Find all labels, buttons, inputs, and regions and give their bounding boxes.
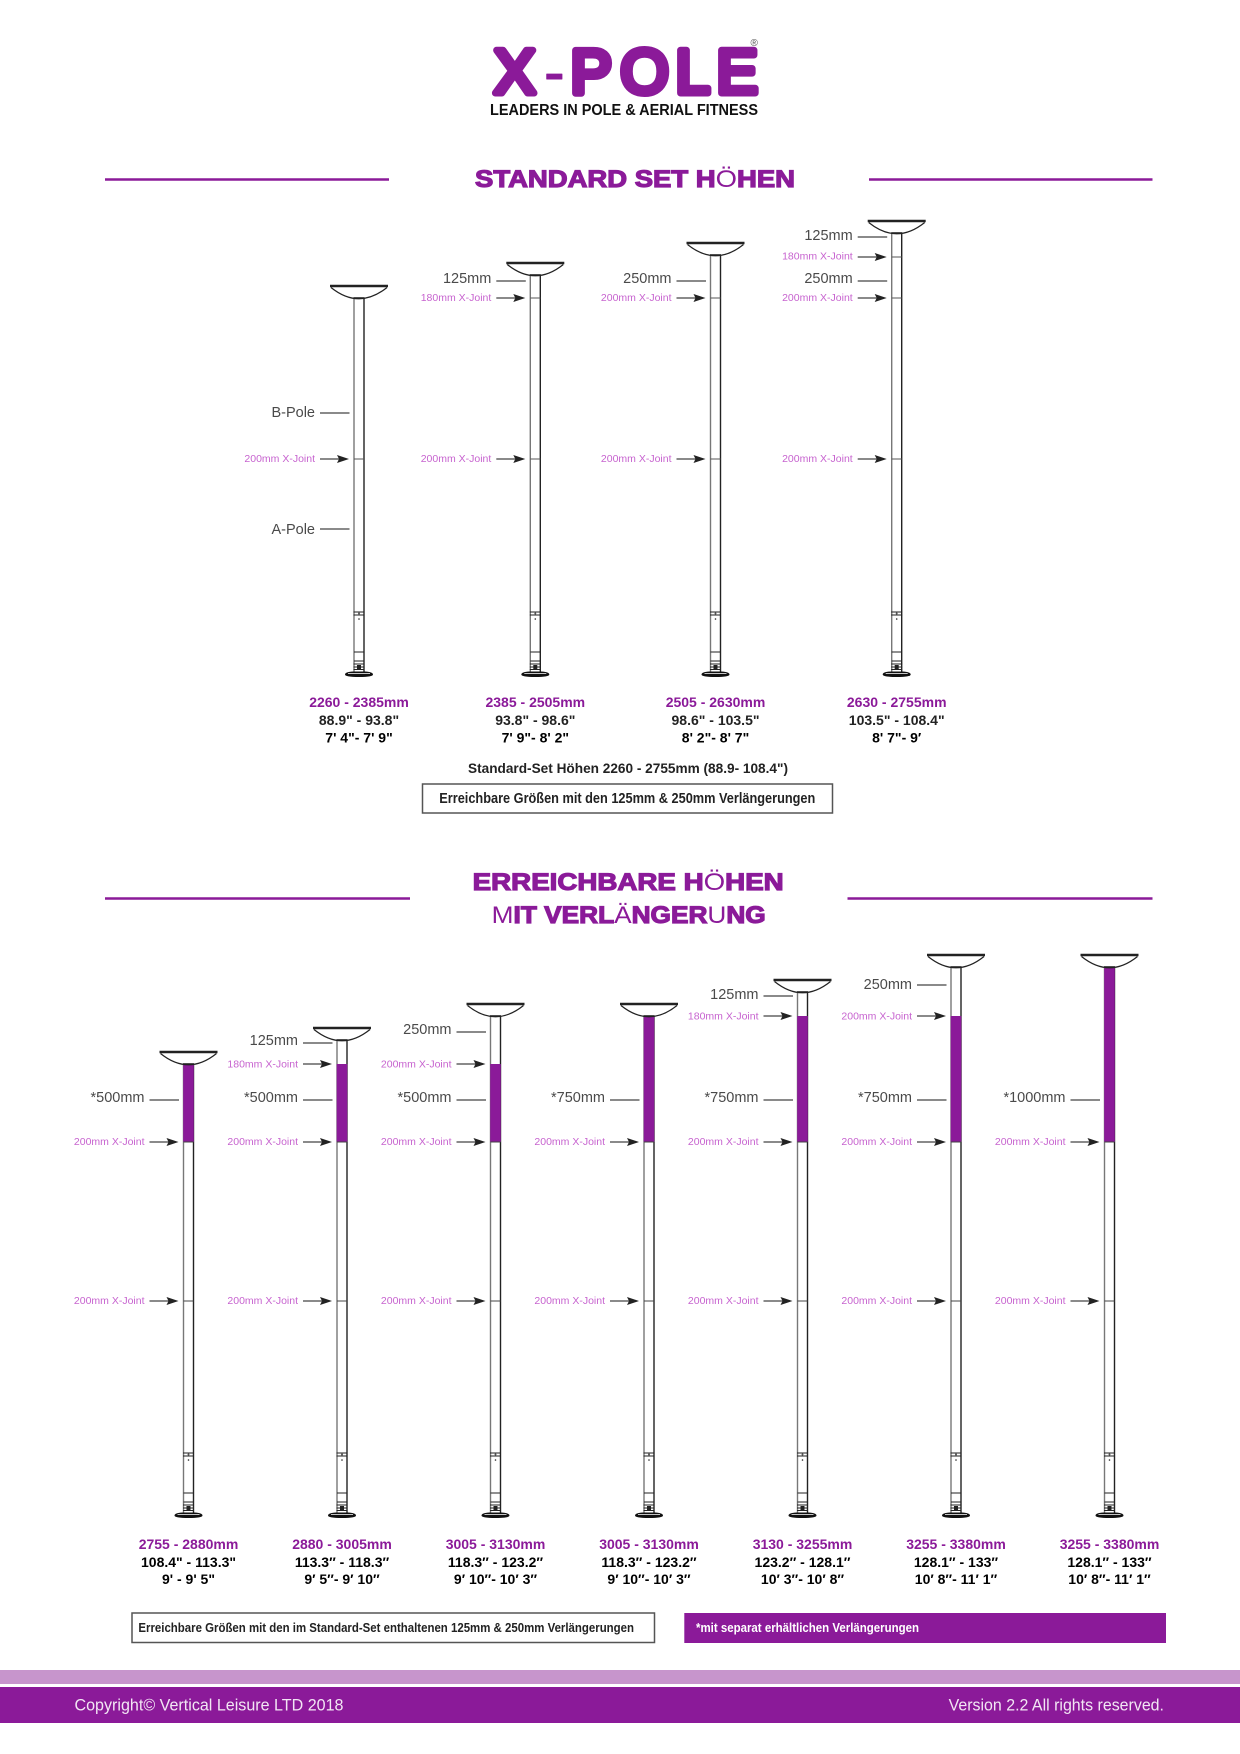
logo wordmark: L [676, 38, 710, 107]
callout: 200mm joint lower: 200mm X-Joint [782, 453, 853, 465]
callout: 200mm joint upper: 200mm X-Joint [782, 292, 853, 304]
note box: reachable sizes: Erreichbare Größen mit den 125mm & 250mm Verlängerungen [439, 791, 815, 807]
callout: 200mm joint lower: 200mm X-Joint [601, 453, 672, 465]
height values: 123.2″ - 128.1″ [755, 1554, 851, 1570]
callout: B-Pole [271, 405, 350, 421]
height values [309, 694, 409, 746]
callout: 200mm joint upper [995, 1136, 1100, 1148]
callout: 200mm joint lower [534, 1295, 639, 1307]
extended pole 7: 3255-3380mm [995, 955, 1159, 1587]
callout: 750mm extension [704, 1090, 793, 1106]
callout: 200mm joint: 200mm X-Joint [421, 453, 491, 465]
logo wordmark: X [494, 38, 535, 107]
callout: 200mm joint lower [995, 1295, 1100, 1307]
callout: 200mm joint upper [688, 1136, 792, 1148]
callout: 250mm: 250mm [804, 271, 853, 287]
heading: reachable heights with extension [105, 869, 1152, 929]
callout: 750mm extension: *750mm [858, 1090, 912, 1106]
extended pole 3: 3005-3130mm [381, 1004, 545, 1587]
height values: 3255 - 3380mm [906, 1536, 1006, 1552]
height values: 2260 - 2385mm [309, 694, 409, 710]
callout: 200mm joint lower: 200mm X-Joint [227, 1295, 298, 1307]
callout: 500mm extension [244, 1090, 332, 1106]
height values [599, 1536, 699, 1587]
height values [906, 1536, 1006, 1587]
callout: 200mm joint [421, 453, 525, 465]
heading: reachable heights with extension: ERREICHBARE H ÖHEN [473, 869, 784, 896]
callout: 200mm joint upper [534, 1136, 639, 1148]
callout: 500mm extension [90, 1090, 179, 1106]
height values: 8' 2"- 8' 7" [682, 730, 749, 746]
height values [847, 694, 947, 746]
callout: 200mm joint upper [601, 292, 706, 304]
callout: 1000mm extension: *1000mm [1003, 1090, 1066, 1106]
extended pole 6: 3255-3380mm [841, 955, 1006, 1587]
callout: 750mm extension: *750mm [551, 1090, 605, 1106]
height values: 2755 - 2880mm [139, 1536, 238, 1552]
callout: 200mm joint top: 200mm X-Joint [381, 1058, 452, 1070]
pole body [1080, 955, 1138, 1518]
callout: 200mm joint lower: 200mm X-Joint [381, 1295, 452, 1307]
copyright: Copyright© Vertical Leisure LTD 2018 [74, 1696, 344, 1714]
callout: 200mm joint lower [782, 453, 887, 465]
pole 1: 2260-2385mm [244, 286, 409, 746]
pole body [330, 286, 388, 677]
note box: included extensions: Erreichbare Größen mit den im Standard-Set enthaltenen 125mm & 250mm Verlängerungen [138, 1621, 634, 1635]
standard set range text: Standard-Set Höhen 2260 - 2755mm (88.9- 108.4") [468, 760, 788, 776]
footer [0, 1687, 1240, 1723]
callout: 125mm [710, 987, 793, 1003]
height values: 88.9" - 93.8" [319, 712, 399, 728]
callout: 200mm joint upper [227, 1136, 332, 1148]
callout: 125mm: 125mm [250, 1033, 298, 1049]
tagline: LEADERS IN POLE & AERIAL FITNESS [490, 102, 758, 119]
callout: 200mm joint lower [841, 1295, 946, 1307]
callout: 200mm joint top: 200mm X-Joint [841, 1010, 912, 1022]
callout: 750mm extension [551, 1090, 640, 1106]
height values: 9' - 9' 5" [162, 1571, 215, 1587]
height values [485, 694, 585, 746]
height values: 9′ 5″- 9′ 10″ [304, 1571, 380, 1587]
callout: 200mm joint lower: 200mm X-Joint [841, 1295, 912, 1307]
callout: 200mm joint lower [601, 453, 706, 465]
callout: A-Pole [271, 522, 350, 538]
callout: 250mm: 250mm [623, 271, 672, 287]
height values: 3005 - 3130mm [599, 1536, 699, 1552]
callout: 200mm joint upper: 200mm X-Joint [688, 1136, 759, 1148]
callout: 500mm extension: *500mm [398, 1090, 452, 1106]
note box: included extensions [132, 1613, 654, 1642]
height values: 9′ 10″- 10′ 3″ [607, 1571, 691, 1587]
height values: 118.3″ - 123.2″ [601, 1554, 697, 1570]
callout: 180mm joint: 180mm X-Joint [782, 250, 853, 262]
callout: 125mm: 125mm [804, 228, 853, 244]
callout: 125mm [443, 271, 526, 287]
callout: 250mm [804, 271, 887, 287]
pole 3: 2505-2630mm [601, 243, 765, 746]
height values: 103.5" - 108.4" [849, 712, 945, 728]
height values: 10′ 8″- 11′ 1″ [1068, 1571, 1151, 1587]
height values: 2880 - 3005mm [292, 1536, 392, 1552]
height values: 118.3″ - 123.2″ [448, 1554, 543, 1570]
pole body [774, 980, 832, 1518]
pole 4: 2630-2755mm [782, 221, 947, 746]
callout: 180mm joint: 180mm X-Joint [688, 1010, 759, 1022]
heading: standard set: STANDARD SET H ÖHEN [475, 166, 795, 193]
extended pole 2: 2880-3005mm [227, 1028, 392, 1587]
height values [292, 1536, 392, 1587]
callout: 180mm joint [688, 1010, 792, 1022]
extended pole 1: 2755-2880mm [74, 1052, 238, 1587]
height values: 10′ 3″- 10′ 8″ [761, 1571, 844, 1587]
callout: 200mm joint: 200mm X-Joint [244, 453, 315, 465]
note box: separately available extensions: *mit separat erhältlichen Verlängerungen [696, 1621, 919, 1635]
logo wordmark: P [570, 38, 612, 107]
callout: 200mm joint upper: 200mm X-Joint [74, 1136, 145, 1148]
callout: 200mm joint top [841, 1010, 946, 1022]
callout: 500mm extension [398, 1090, 486, 1106]
pole body [686, 243, 744, 677]
height values: 108.4" - 113.3" [141, 1554, 236, 1570]
logo [490, 38, 758, 119]
pole 2: 2385-2505mm [421, 263, 585, 746]
callout: 125mm: 125mm [443, 271, 491, 287]
callout: 200mm joint [244, 453, 349, 465]
callout: 125mm [804, 228, 887, 244]
callout: 200mm joint upper [381, 1136, 486, 1148]
height values: 128.1″ - 133″ [914, 1554, 998, 1570]
callout: 200mm joint lower [381, 1295, 486, 1307]
callout: 125mm [250, 1033, 332, 1049]
callout: 750mm extension: *750mm [704, 1090, 758, 1106]
height values: 7' 4"- 7' 9" [325, 730, 393, 746]
note box: reachable sizes [422, 784, 832, 813]
pole body [160, 1052, 218, 1518]
height values: 8' 7"- 9′ [872, 730, 922, 746]
callout: 200mm joint lower: 200mm X-Joint [995, 1295, 1066, 1307]
pole body [868, 221, 926, 677]
callout: 250mm [623, 271, 706, 287]
height values: 113.3″ - 118.3″ [295, 1554, 389, 1570]
callout: B-Pole: B-Pole [271, 405, 315, 421]
callout: 200mm joint lower: 200mm X-Joint [74, 1295, 145, 1307]
callout: 200mm joint top [381, 1058, 486, 1070]
logo wordmark: - [544, 38, 565, 107]
logo wordmark: E [716, 38, 758, 107]
height values: 9′ 10″- 10′ 3″ [454, 1571, 537, 1587]
callout: 180mm joint [227, 1058, 332, 1070]
height values [446, 1536, 545, 1587]
heading: reachable heights with extension: MIT VERL ÄNGER UNG [492, 902, 766, 929]
logo wordmark: O [620, 38, 669, 107]
callout: 750mm extension [858, 1090, 946, 1106]
callout: 200mm joint upper: 200mm X-Joint [227, 1136, 298, 1148]
callout: 200mm joint lower [688, 1295, 792, 1307]
height values [666, 694, 765, 746]
callout: 250mm [864, 977, 946, 993]
callout: 500mm extension: *500mm [244, 1090, 298, 1106]
callout: 1000mm extension [1003, 1090, 1100, 1106]
callout: 200mm joint upper: 200mm X-Joint [381, 1136, 452, 1148]
callout: 180mm joint: 180mm X-Joint [421, 292, 491, 304]
callout: 250mm: 250mm [864, 977, 912, 993]
callout: 200mm joint lower: 200mm X-Joint [534, 1295, 605, 1307]
callout: 180mm joint: 180mm X-Joint [227, 1058, 298, 1070]
height values: 3005 - 3130mm [446, 1536, 545, 1552]
footer light band [0, 1670, 1240, 1684]
callout: 200mm joint upper: 200mm X-Joint [601, 292, 672, 304]
callout: 200mm joint upper: 200mm X-Joint [995, 1136, 1066, 1148]
height values [753, 1536, 852, 1587]
callout: 200mm joint upper [74, 1136, 178, 1148]
pole body [927, 955, 985, 1518]
pole body [313, 1028, 371, 1518]
callout: 180mm joint [782, 250, 887, 262]
registered mark: ® [750, 38, 758, 49]
height values: 93.8" - 98.6" [495, 712, 575, 728]
pole body [620, 1004, 678, 1518]
callout: 200mm joint upper [782, 292, 887, 304]
note box: separately available extensions [684, 1613, 1166, 1643]
height values [139, 1536, 238, 1587]
height values: 3255 - 3380mm [1060, 1536, 1159, 1552]
callout: 250mm [403, 1022, 486, 1038]
callout: 125mm: 125mm [710, 987, 758, 1003]
height values: 7' 9"- 8' 2" [502, 730, 569, 746]
height values: 3130 - 3255mm [753, 1536, 852, 1552]
callout: 200mm joint lower [227, 1295, 332, 1307]
height values: 2630 - 2755mm [847, 694, 947, 710]
height values: 128.1″ - 133″ [1067, 1554, 1152, 1570]
pole body [466, 1004, 524, 1518]
version: Version 2.2 All rights reserved. [949, 1696, 1164, 1714]
height values: 2505 - 2630mm [666, 694, 765, 710]
height values: 98.6" - 103.5" [672, 712, 760, 728]
callout: 200mm joint upper: 200mm X-Joint [841, 1136, 912, 1148]
extended pole 4: 3005-3130mm [534, 1004, 699, 1587]
height values: 10′ 8″- 11′ 1″ [915, 1571, 997, 1587]
callout: 180mm joint [421, 292, 525, 304]
callout: A-Pole: A-Pole [271, 522, 315, 538]
pole body [506, 263, 564, 677]
callout: 500mm extension: *500mm [90, 1090, 144, 1106]
callout: 200mm joint lower: 200mm X-Joint [688, 1295, 759, 1307]
callout: 250mm: 250mm [403, 1022, 452, 1038]
height values: 2385 - 2505mm [485, 694, 585, 710]
height values [1060, 1536, 1159, 1587]
extended pole 5: 3130-3255mm [688, 980, 852, 1587]
callout: 200mm joint upper [841, 1136, 946, 1148]
callout: 200mm joint upper: 200mm X-Joint [534, 1136, 605, 1148]
callout: 200mm joint lower [74, 1295, 178, 1307]
